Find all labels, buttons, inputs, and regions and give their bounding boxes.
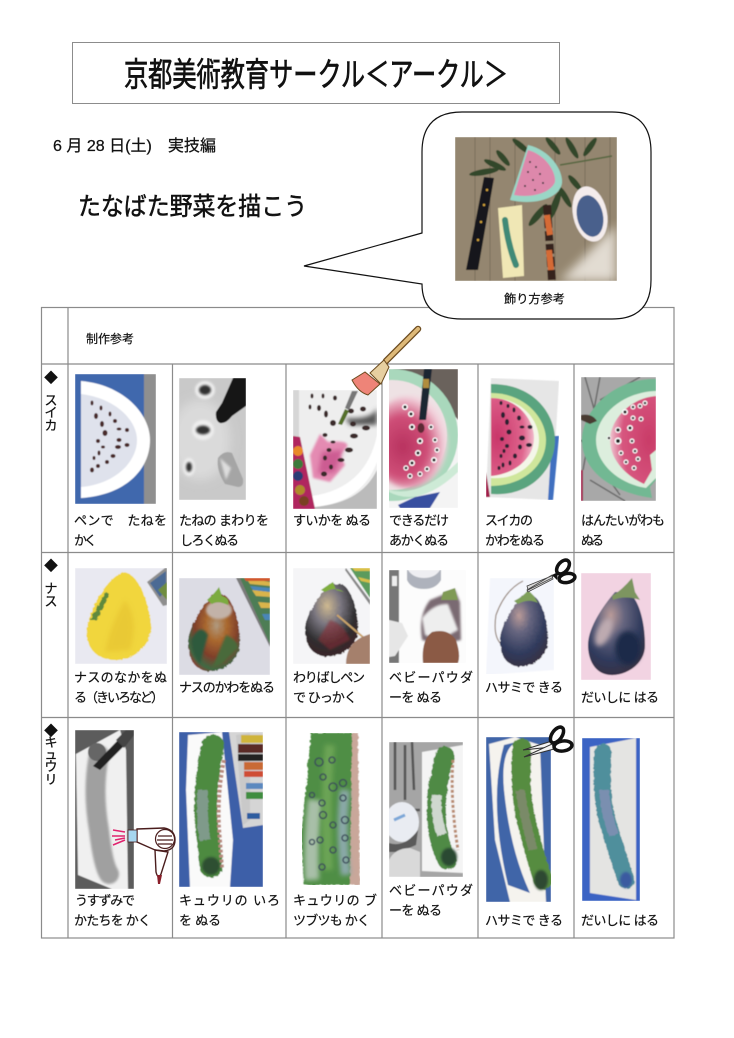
caption xyxy=(179,513,269,548)
row label: キュウリ: ュ xyxy=(44,747,58,762)
step: apply baby powder to cucumber xyxy=(385,742,473,918)
row label: ナス: ス xyxy=(44,594,58,609)
photo: watermelon with green rind xyxy=(486,378,559,500)
step: paint the rind xyxy=(485,378,559,548)
caption: ハサミで きる xyxy=(485,680,563,695)
row label: スイカ: ス xyxy=(44,393,58,408)
title box xyxy=(72,42,560,104)
step: cut with scissors xyxy=(485,578,563,695)
row label: キュウリ: ウ xyxy=(44,759,58,774)
step: stick on base paper xyxy=(581,573,659,705)
caption: かたちを かく xyxy=(74,913,151,928)
caption: すいかを ぬる xyxy=(293,513,371,528)
caption xyxy=(74,513,167,548)
subtitle: たなばた野菜を描こう xyxy=(78,193,307,221)
photo: teal cucumber on blue xyxy=(582,738,640,901)
icon: scissors (cucumber) xyxy=(523,725,573,757)
icon: paint brush xyxy=(352,329,418,395)
row label: ナス: ◆ xyxy=(44,558,58,574)
photo: pink wash with palette xyxy=(293,390,377,509)
caption xyxy=(293,670,365,705)
caption xyxy=(389,513,449,548)
photo: white paper watermelon on blue xyxy=(75,374,156,504)
caption xyxy=(485,513,545,548)
photo: powdered cucumber xyxy=(389,742,463,877)
photo: opposite side watermelon xyxy=(581,377,656,501)
caption: る（きいろなど） xyxy=(74,690,164,705)
photo: tanabata decoration xyxy=(455,137,617,281)
row label: スイカ xyxy=(44,370,58,433)
row label: キュウリ: キ xyxy=(44,735,58,750)
caption: あかくぬる xyxy=(389,533,449,548)
photo: green cucumber on paper xyxy=(179,732,263,887)
caption: を ぬる xyxy=(179,913,221,928)
caption: うすずみで xyxy=(75,893,135,908)
caption: ハサミで きる xyxy=(485,913,563,928)
caption: だいしに はる xyxy=(581,690,659,705)
title text: 京都美術教育サークル＜アークル＞ xyxy=(124,56,508,93)
row label: キュウリ: リ xyxy=(44,772,58,787)
row label: ナス xyxy=(44,558,58,609)
row label: キュウリ: ◆ xyxy=(44,723,58,739)
caption: ベビーパウダ xyxy=(389,883,473,898)
photo: eggplant on pink xyxy=(581,573,651,680)
row label: キュウリ xyxy=(44,723,58,787)
caption: 飾り方参考 xyxy=(504,291,565,306)
table grid xyxy=(42,308,674,938)
row label: スイカ: イ xyxy=(44,405,58,420)
caption xyxy=(293,893,377,928)
caption: キュウリの ブ xyxy=(293,893,377,908)
caption: できるだけ xyxy=(389,513,449,528)
caption: ーを ぬる xyxy=(389,903,442,918)
caption: ナスのかわをぬる xyxy=(179,680,275,695)
caption: キュウリの いろ xyxy=(179,893,280,908)
caption xyxy=(389,670,473,705)
icon: scissors (eggplant) xyxy=(527,558,576,592)
step: paint around seeds white xyxy=(170,378,269,548)
caption: かわをぬる xyxy=(485,533,545,548)
step: scratch with chopstick pen xyxy=(293,568,370,705)
caption: かく xyxy=(74,533,97,548)
photo: ink cucumber stroke xyxy=(75,730,134,889)
row label: スイカ: ◆ xyxy=(44,370,58,386)
step: pen seeds xyxy=(74,374,167,548)
caption: しろくぬる xyxy=(180,533,239,548)
caption xyxy=(74,893,151,928)
caption: だいしに はる xyxy=(581,913,659,928)
step: paint the other side xyxy=(581,377,665,548)
caption xyxy=(389,883,473,918)
photo: cucumber close up xyxy=(302,733,360,885)
photo: grayscale seeds with black marker xyxy=(179,378,246,500)
caption: ベビーパウダ xyxy=(389,670,473,685)
caption: ぬる xyxy=(581,533,604,548)
photo: hand with tissue and tin xyxy=(389,570,463,663)
caption: で ひっかく xyxy=(293,690,357,705)
step: paint as red as possible xyxy=(326,369,458,548)
row label: ナス: ナ xyxy=(44,581,58,596)
step: paint the watermelon xyxy=(293,390,377,528)
step: paint inside of eggplant xyxy=(74,568,167,705)
caption xyxy=(581,513,665,548)
caption: ツブツも かく xyxy=(293,913,370,928)
step: stick cucumber on base paper xyxy=(581,738,659,928)
step: paint the eggplant skin xyxy=(179,578,275,695)
caption: はんたいがわも xyxy=(581,513,665,528)
photo: pastel eggplant with skin xyxy=(179,578,270,675)
step: paint cucumber colour xyxy=(179,732,280,928)
photo: cut cucumber on blue xyxy=(486,737,551,902)
step: draw the bumps xyxy=(293,733,377,928)
caption: ナスのなかをぬ xyxy=(74,670,167,685)
heading: 制作参考: 制作参考 xyxy=(86,332,134,346)
icon: hair dryer xyxy=(112,828,175,884)
caption: スイカの xyxy=(485,513,533,528)
photo: red watermelon with brush xyxy=(389,369,458,508)
photo: yellow crayon shape xyxy=(75,568,167,664)
speech bubble xyxy=(304,112,651,319)
date line: 6 月 28 日(土) 実技編 xyxy=(53,137,216,155)
photo: cut eggplant xyxy=(486,578,554,674)
step: draw shape with thin ink xyxy=(74,730,151,928)
step: cut cucumber with scissors xyxy=(485,737,563,928)
caption: わりばしペン xyxy=(293,670,365,685)
row label: スイカ: カ xyxy=(44,418,58,433)
caption: ーを ぬる xyxy=(389,690,442,705)
step: apply baby powder xyxy=(389,570,473,705)
photo: scratching with stick xyxy=(294,568,370,664)
caption: ペンで たねを xyxy=(74,513,167,528)
caption xyxy=(179,893,280,928)
caption: たねの まわりを xyxy=(179,513,269,528)
caption xyxy=(74,670,167,705)
